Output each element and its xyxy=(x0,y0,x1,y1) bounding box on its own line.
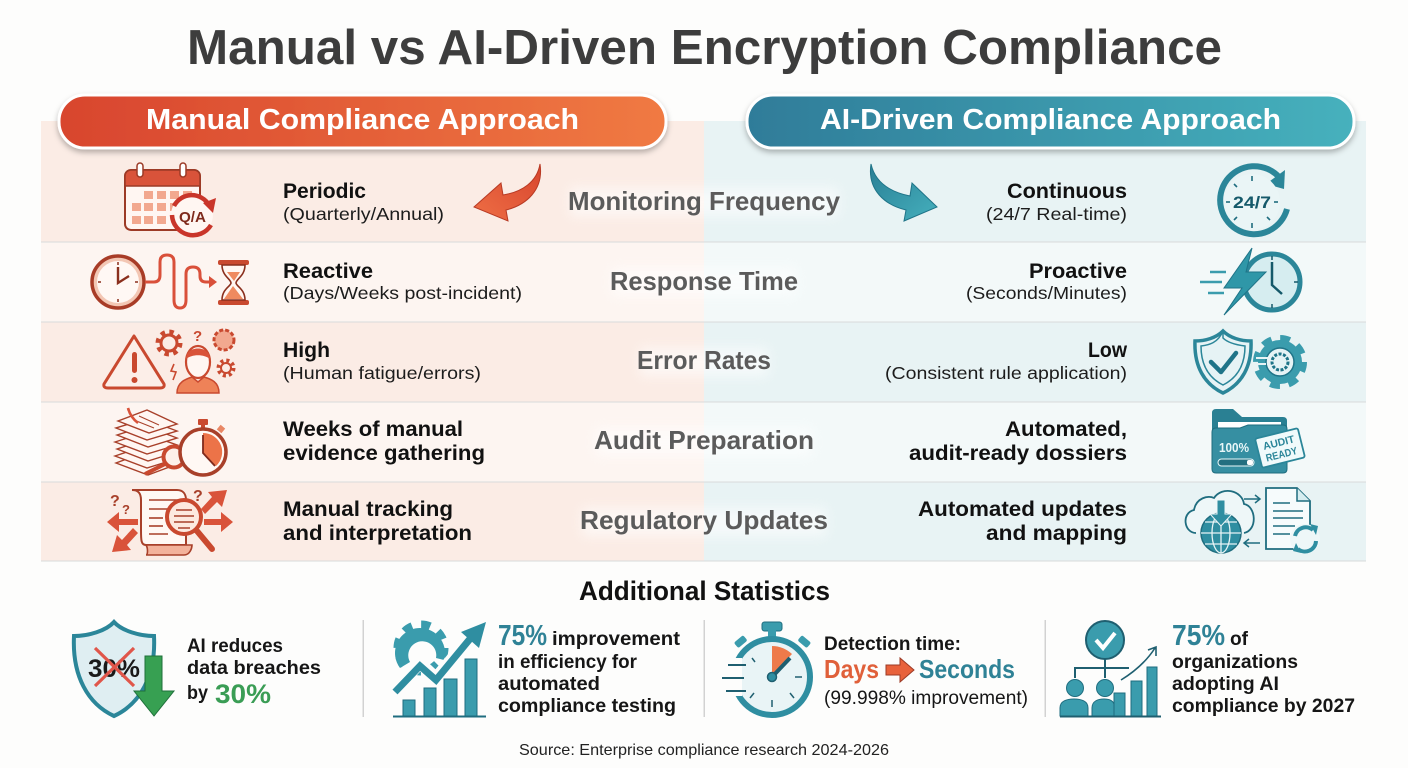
text: 75% of organizations: compliance by 2027 xyxy=(1172,695,1355,717)
manual column text: Periodic xyxy=(283,180,366,203)
stat: AI reduces breaches xyxy=(74,622,321,716)
text: detection time days to seconds: Seconds xyxy=(919,654,1015,684)
text: 75% improvement in efficiency: automated xyxy=(498,673,600,695)
icon: audit-ready folder: AUDIT xyxy=(1262,433,1296,453)
icon: 24/7 clock xyxy=(1220,166,1287,234)
row labels: Regulatory Updates xyxy=(580,505,828,535)
icon: stopwatch xyxy=(718,622,811,715)
AI column text: Continuous xyxy=(1007,180,1127,203)
AI column text: and mapping xyxy=(986,522,1127,545)
icon: scroll, magnifier and arrows xyxy=(107,488,233,555)
panel: manual column background xyxy=(41,121,704,561)
manual column text: Manual tracking xyxy=(283,498,453,521)
icon: shield and gear xyxy=(1195,331,1304,393)
text: detection time days to seconds: (99.998% improvement) xyxy=(824,687,1028,709)
manual column text: (Quarterly/Annual) xyxy=(283,204,444,224)
manual column text: Reactive xyxy=(283,260,373,283)
AI column text: Proactive xyxy=(1029,260,1127,283)
icon: shield with crossed 30% and down arrow xyxy=(74,622,174,716)
AI column text: Automated, xyxy=(1005,418,1127,441)
manual column text: (Days/Weeks post-incident) xyxy=(283,283,522,303)
icon: audit-ready folder: READY xyxy=(1265,445,1299,464)
icon: scroll, magnifier and arrows: ? xyxy=(122,502,130,517)
text: AI reduces data breaches by 30% xyxy=(187,635,321,709)
text: AI reduces data breaches by 30%: by xyxy=(187,682,208,704)
AI column text: Low xyxy=(1088,339,1128,362)
text: AI reduces data breaches by 30%: 30% xyxy=(215,679,271,709)
manual column text: Weeks of manual xyxy=(283,418,463,441)
AI column text: Automated updates xyxy=(918,498,1127,521)
header: AI-Driven Compliance Approach xyxy=(747,95,1354,148)
text: detection time days to seconds xyxy=(824,633,1028,709)
AI column text: audit-ready dossiers xyxy=(909,442,1127,465)
manual column text: and interpretation xyxy=(283,522,472,545)
text: 75% of organizations xyxy=(1172,620,1355,717)
icon: cloud globe and document xyxy=(1186,488,1320,554)
icon: shield with crossed 30% and down arrow: 30% xyxy=(88,655,140,683)
icon: audit-ready folder xyxy=(1212,409,1305,473)
manual column text: High xyxy=(283,339,330,362)
AI column text xyxy=(885,180,1128,545)
panel: AI column background xyxy=(704,121,1366,561)
header: Manual Compliance Approach: Manual Compliance Approach xyxy=(146,104,579,136)
text: 75% of organizations: 75% xyxy=(1172,620,1225,652)
icon: scroll, magnifier and arrows: ? xyxy=(110,493,120,510)
text: detection time days to seconds: Detection time: xyxy=(824,633,961,655)
text: 75% of organizations: organizations xyxy=(1172,651,1298,673)
arrow: AI xyxy=(870,164,937,221)
row labels xyxy=(568,186,841,535)
AI column text: (Consistent rule application) xyxy=(885,363,1127,383)
text: AI reduces data breaches by 30%: data breaches xyxy=(187,657,321,679)
title: Manual vs AI-Driven Encryption Compliance xyxy=(187,21,1222,75)
text: 75% improvement in efficiency: improvement xyxy=(552,628,681,650)
source note: Source: Enterprise compliance research 2024-2026 xyxy=(519,742,889,759)
icon: audit-ready folder: 100% xyxy=(1219,440,1249,455)
arrow: manual xyxy=(474,164,541,221)
icon: 24/7 clock: 24/7 xyxy=(1233,193,1271,212)
row labels: Error Rates xyxy=(637,345,771,375)
header: AI-Driven Compliance Approach: AI-Driven Compliance Approach xyxy=(820,104,1281,136)
text: detection time days to seconds: Days xyxy=(824,654,879,684)
icon: scroll, magnifier and arrows: ? xyxy=(193,488,203,505)
icon: calendar Q/A xyxy=(125,163,216,236)
stat: 75% efficiency xyxy=(393,620,681,717)
icon: warning and stressed person xyxy=(104,328,234,393)
text: 75% of organizations: adopting AI xyxy=(1172,673,1279,695)
heading: additional statistics: Additional Statistics xyxy=(579,576,830,606)
AI column text: (24/7 Real-time) xyxy=(986,204,1127,224)
icon: gear, growth arrow and bars xyxy=(393,622,486,716)
row labels: Audit Preparation xyxy=(594,425,814,455)
icon: papers and stopwatch xyxy=(115,408,226,475)
comparison table xyxy=(41,121,1366,561)
text: 75% improvement in efficiency: compliance testing xyxy=(498,695,676,717)
row labels: Monitoring Frequency xyxy=(568,186,841,216)
icon: calendar Q/A: Q/A xyxy=(179,209,206,226)
AI column text: (Seconds/Minutes) xyxy=(966,283,1127,303)
manual column text: evidence gathering xyxy=(283,442,485,465)
text: AI reduces data breaches by 30%: AI reduces xyxy=(187,635,283,657)
row labels: Response Time xyxy=(610,266,798,296)
icon: people, check and bars xyxy=(1060,621,1161,716)
stat: detection time xyxy=(718,622,1028,715)
text: 75% improvement in efficiency xyxy=(498,620,681,717)
manual column text: (Human fatigue/errors) xyxy=(283,363,481,383)
stat: adoption by 2027 xyxy=(1060,620,1355,717)
icon: warning and stressed person: ? xyxy=(193,328,202,345)
header: Manual Compliance Approach xyxy=(59,95,666,148)
text: 75% improvement in efficiency: 75% xyxy=(498,620,547,652)
text: 75% improvement in efficiency: in efficiency for xyxy=(498,651,637,673)
text: 75% of organizations: of xyxy=(1230,628,1248,650)
icon: clock to hourglass xyxy=(92,255,249,308)
manual column text xyxy=(283,180,522,545)
icon: lightning bolt clock xyxy=(1200,248,1300,315)
